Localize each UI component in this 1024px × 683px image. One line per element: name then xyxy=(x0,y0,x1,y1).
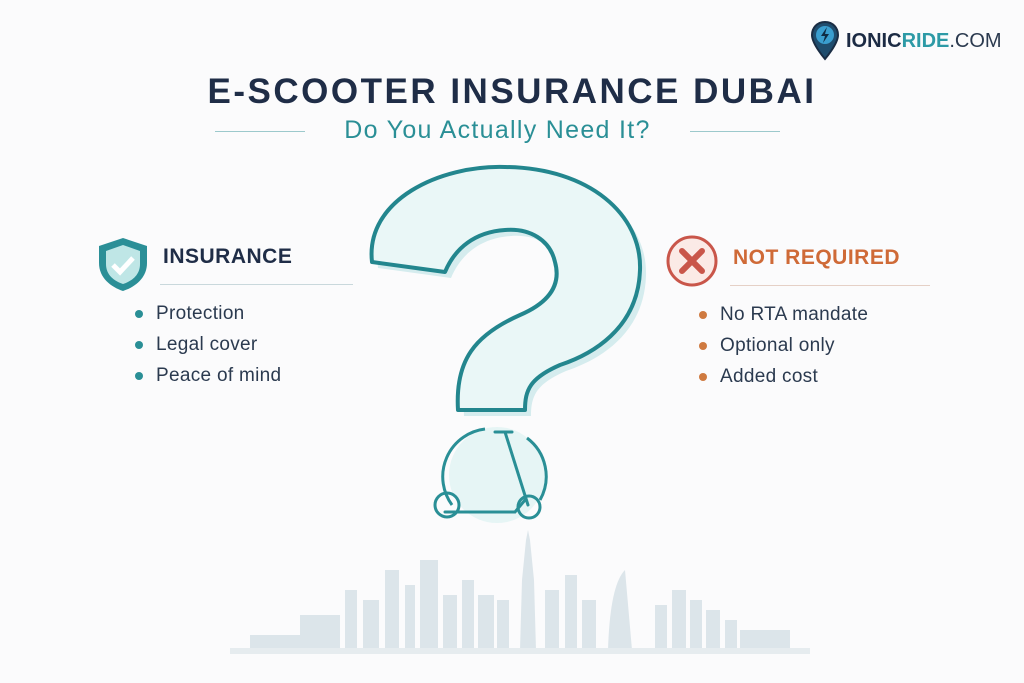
list: drawbacks xyxy=(699,304,868,386)
list: drawbacks: No RTA mandate xyxy=(720,304,868,324)
skyline xyxy=(230,530,810,654)
question mark xyxy=(370,164,646,416)
list: benefits: Protection xyxy=(156,302,245,324)
subtitle: Do You Actually Need It? xyxy=(344,116,651,144)
list: drawbacks: Optional only xyxy=(720,334,835,356)
list: benefits: Legal cover xyxy=(156,334,258,354)
panel: not required: NOT REQUIRED xyxy=(733,246,900,269)
icon: shield xyxy=(99,238,147,291)
panel: insurance xyxy=(99,238,353,386)
list: benefits xyxy=(135,302,281,386)
icon: x circle xyxy=(666,236,718,286)
list: drawbacks: Added cost xyxy=(720,366,818,386)
logo xyxy=(811,21,1002,60)
logo: IONICRIDE.COM xyxy=(846,30,1002,52)
icon: scooter in circle xyxy=(434,427,548,523)
panel: insurance: INSURANCE xyxy=(163,245,292,268)
title: E-SCOOTER INSURANCE DUBAI xyxy=(208,72,816,111)
list: benefits: Peace of mind xyxy=(156,364,281,386)
panel: not required xyxy=(666,236,930,386)
